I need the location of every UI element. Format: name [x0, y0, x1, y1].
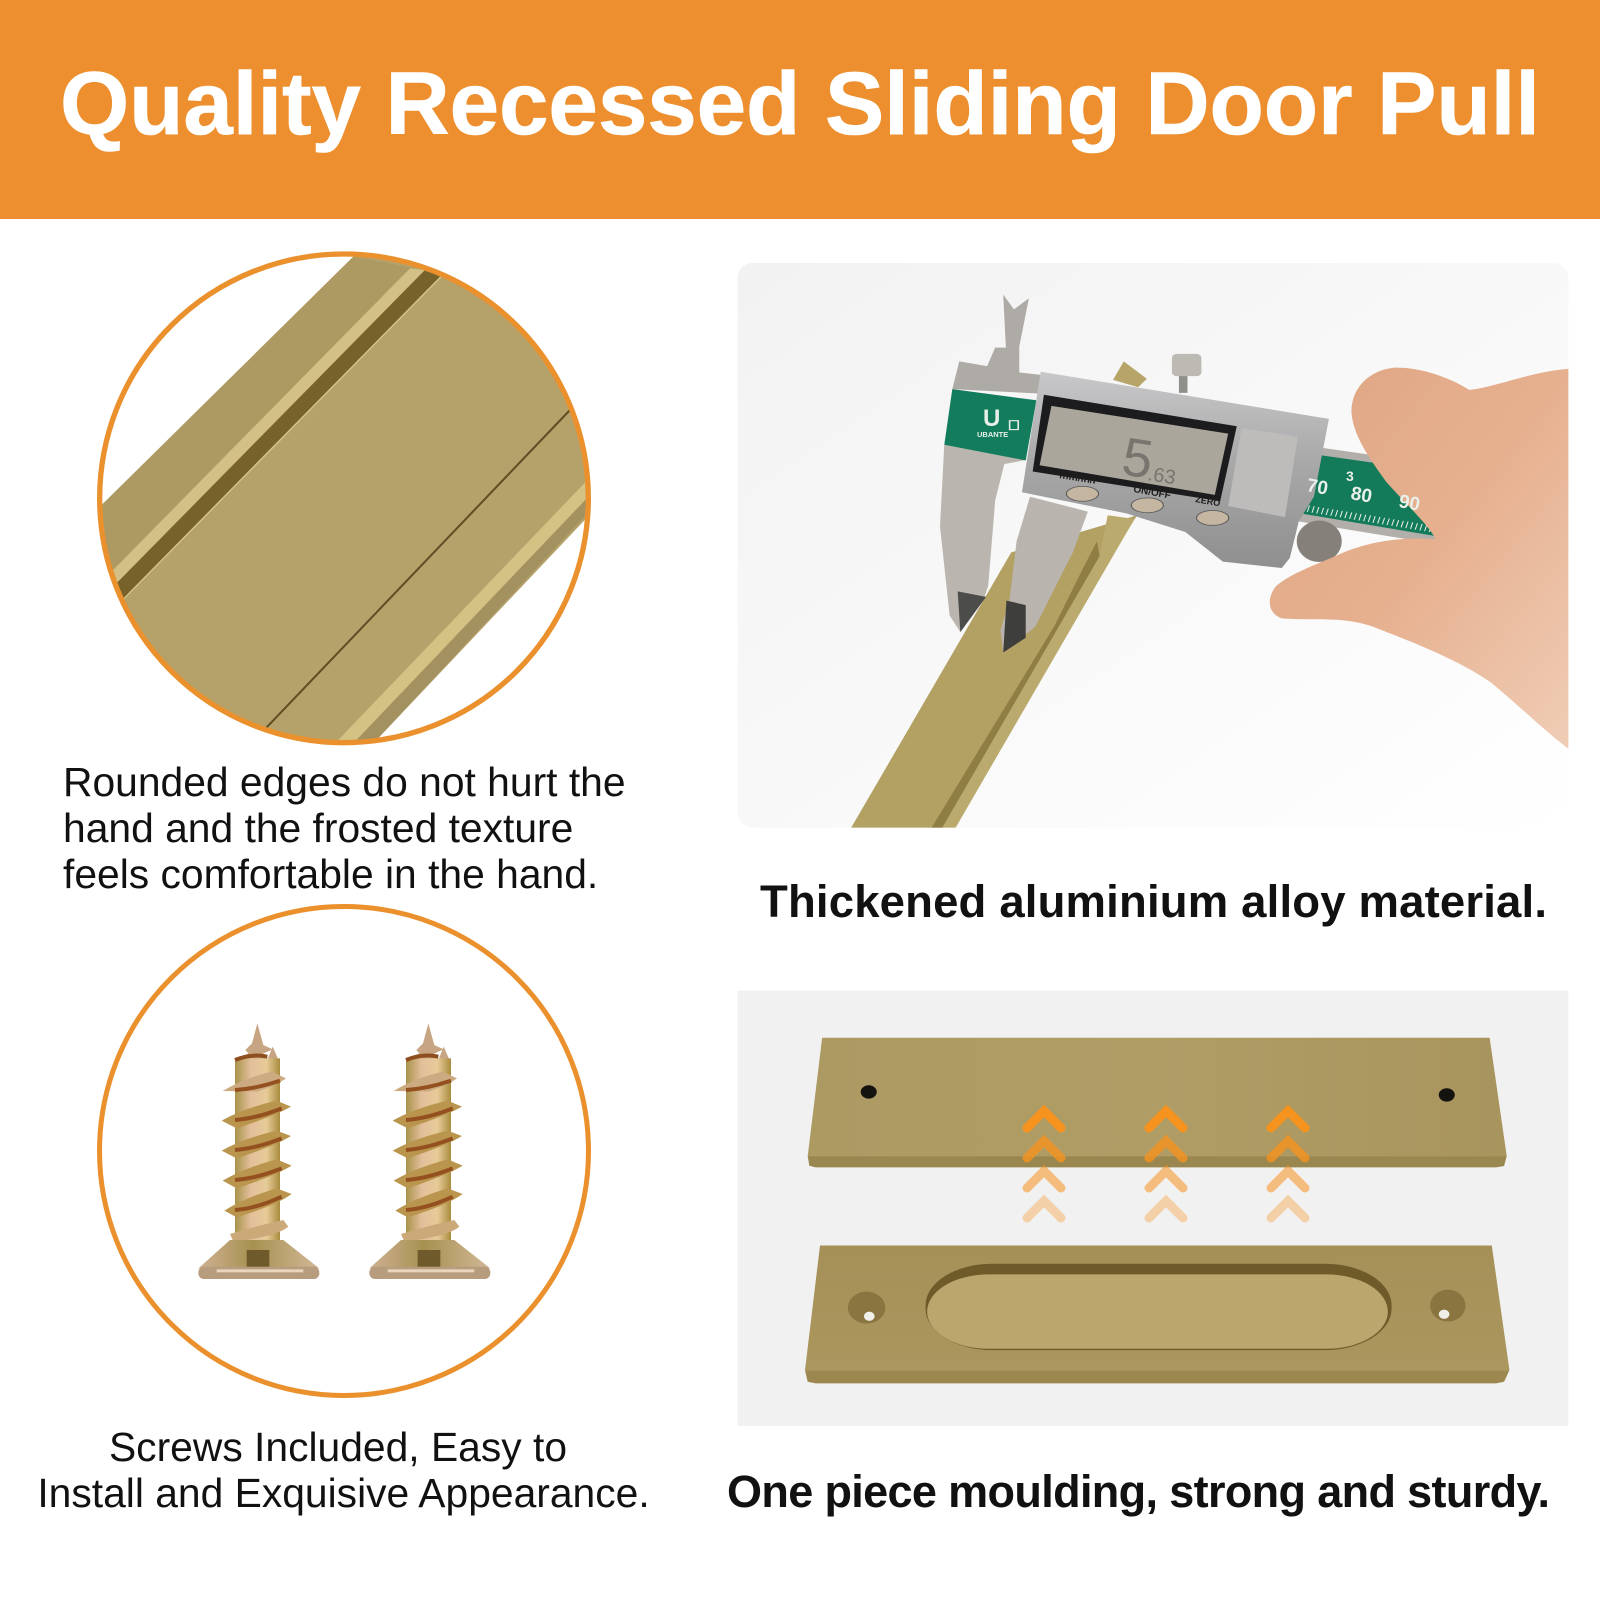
panel: screws circle — [100, 906, 588, 1396]
caliper markings: UBANTE — [977, 430, 1008, 439]
control plate — [1228, 428, 1298, 517]
caliper markings: U — [983, 405, 1000, 432]
caliper markings: 5 — [1118, 427, 1157, 491]
icon: two screws — [198, 1023, 490, 1279]
caliper markings: ON/OFF — [1132, 484, 1172, 502]
caliper sliding jaw — [1001, 497, 1088, 653]
text: rounded edges caption: feels comfortable in the hand. — [63, 851, 598, 897]
caliper markings: mm/in/F — [1059, 469, 1101, 487]
top plate — [808, 1038, 1507, 1167]
caption: thickened aluminium: Thickened aluminium alloy material. — [760, 876, 1547, 927]
panel: rounded edges close-up circle — [83, 253, 610, 760]
panel: one piece moulding photo — [737, 991, 1568, 1426]
caliper markings: ZERO — [1195, 494, 1221, 508]
caliper main jaw — [940, 295, 1042, 632]
bottom plate — [805, 1245, 1509, 1383]
text: screws caption: Install and Exquisive Appearance. — [37, 1470, 650, 1516]
caliper markings: 90 — [1397, 491, 1422, 516]
arrows: three columns of upward chevrons — [1027, 1111, 1305, 1218]
lock screw — [1172, 354, 1201, 393]
text: rounded edges caption: Rounded edges do not hurt the — [63, 759, 626, 805]
caliper markings: 70 — [1305, 475, 1330, 500]
text: screws caption: Screws Included, Easy to — [109, 1424, 567, 1470]
gold channel profile — [851, 361, 1147, 829]
text: rounded edges caption: hand and the frosted texture — [63, 805, 573, 851]
title: Quality Recessed Sliding Door Pull — [60, 53, 1540, 153]
caliper body — [1022, 372, 1329, 568]
green ruler — [1298, 448, 1436, 540]
caliper markings: .63 — [1146, 463, 1177, 489]
panel: caliper measuring photo — [737, 263, 1571, 829]
text: screws caption — [37, 1424, 650, 1516]
header banner — [0, 0, 1600, 219]
LCD display — [1033, 395, 1237, 501]
hand — [1270, 368, 1571, 751]
caliper markings: 80 — [1349, 483, 1374, 508]
caliper markings: 3 — [1346, 468, 1354, 484]
text: rounded edges caption — [63, 759, 626, 897]
caliper buttons — [1066, 486, 1229, 525]
caption: one piece moulding: One piece moulding, strong and sturdy. — [727, 1466, 1550, 1517]
thumb wheel — [1297, 520, 1342, 562]
caliper markings — [977, 405, 1422, 516]
